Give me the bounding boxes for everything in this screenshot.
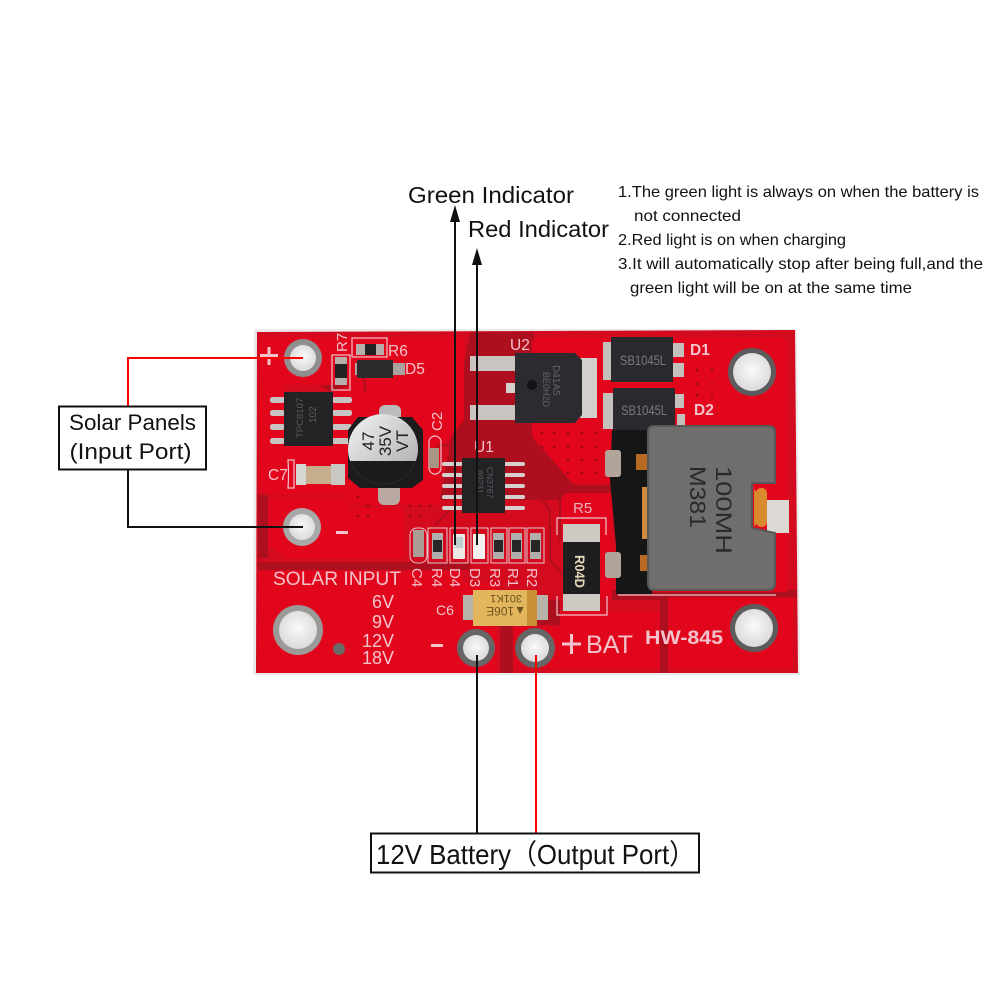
silkscreen labels: D5 — [405, 361, 425, 378]
silkscreen labels: D1 — [690, 342, 710, 359]
current sense resistor R5: R04D — [572, 555, 588, 588]
wire: battery positive — [535, 655, 537, 833]
silkscreen labels: U1 — [474, 439, 494, 456]
chip U1 CN3767 — [442, 458, 525, 513]
silkscreen labels: 6V — [372, 592, 394, 612]
silkscreen outlines — [288, 338, 776, 615]
silkscreen labels: U2 — [510, 337, 530, 354]
silkscreen labels: R1 — [504, 568, 521, 587]
via dots — [357, 369, 713, 517]
MOSFET U2 — [470, 353, 597, 423]
wire: solar negative — [128, 470, 303, 527]
electrolytic capacitor 47 35V VT: VT — [393, 430, 412, 452]
diode D2: SB1045L — [621, 402, 667, 418]
MOSFET U2: D41A5 — [550, 365, 561, 396]
electrolytic capacitor 47 35V VT — [346, 405, 423, 505]
C7 capacitor — [296, 464, 345, 485]
silkscreen labels: C7 — [268, 467, 288, 484]
C6 tantalum capacitor: ▲106E — [486, 604, 526, 618]
chip TPC8107: 102 — [308, 406, 319, 423]
silkscreen labels: SOLAR INPUT — [273, 569, 401, 590]
label: red indicator: Red Indicator — [468, 216, 609, 242]
indicator notes: 2.Red light is on when charging — [618, 232, 846, 249]
chip U1 CN3767: CN3767 — [485, 467, 495, 498]
inductor 100MH M381: 100MH — [711, 466, 736, 554]
silkscreen labels: C6 — [436, 602, 454, 618]
indicator notes: 3.It will automatically stop after being full,and the — [618, 256, 983, 273]
silkscreen labels: 18V — [362, 648, 394, 668]
indicator notes — [618, 184, 983, 297]
electrolytic capacitor 47 35V VT: 35V — [376, 425, 395, 456]
diode D1: SB1045L — [620, 352, 666, 368]
indicator notes: 1.The green light is always on when the battery is — [618, 184, 979, 201]
indicator notes: not connected — [634, 208, 741, 225]
silkscreen labels — [260, 333, 723, 668]
label: green indicator: Green Indicator — [408, 182, 574, 208]
circuit board — [253, 329, 800, 675]
label: solar panels input port: (Input Port) — [70, 439, 192, 464]
silkscreen labels: R6 — [388, 343, 408, 360]
silkscreen labels: 9V — [372, 612, 394, 632]
chip U1 CN3767: 89231 — [475, 470, 485, 494]
trace lines — [360, 372, 563, 575]
electrolytic capacitor 47 35V VT: 47 — [359, 432, 378, 450]
silkscreen labels: D2 — [694, 402, 714, 419]
silkscreen labels: BAT — [586, 631, 633, 659]
silkscreen labels: R2 — [523, 568, 540, 587]
silkscreen labels: C4 — [408, 568, 425, 587]
diode D1 — [603, 337, 684, 382]
silkscreen labels: R5 — [573, 500, 592, 517]
label: 12V battery output port: 12V Battery（Output Port） — [376, 839, 695, 870]
chip TPC8107 — [270, 392, 352, 446]
C2 capacitor — [429, 448, 439, 468]
mounting holes and terminals — [273, 339, 778, 668]
copper pours — [259, 337, 793, 673]
silkscreen labels: R3 — [486, 568, 503, 587]
current sense resistor R5 — [563, 524, 600, 611]
diode D2 — [603, 388, 685, 432]
silkscreen labels: D3 — [466, 568, 483, 587]
silkscreen labels: R4 — [428, 568, 445, 587]
label: solar panels input port — [59, 406, 206, 470]
inductor 100MH M381: M381 — [685, 466, 710, 528]
indicator notes: green light will be on at the same time — [630, 280, 912, 297]
dark channels — [258, 332, 797, 673]
chip TPC8107: TPC8107 — [295, 398, 306, 438]
silkscreen labels: R7 — [334, 333, 351, 352]
MOSFET U2: BE0H2D — [541, 372, 551, 408]
inductor 100MH M381 — [605, 426, 789, 594]
silkscreen labels: HW-845 — [645, 628, 723, 649]
wire: battery negative — [476, 655, 478, 833]
arrow: green indicator — [450, 205, 460, 545]
silkscreen labels: D4 — [446, 568, 463, 587]
C6 tantalum capacitor: 301K1 — [490, 592, 522, 604]
silkscreen labels: C2 — [429, 412, 446, 431]
silkscreen labels: 12V — [362, 631, 394, 651]
label: solar panels input port: Solar Panels — [69, 410, 196, 435]
wire: solar positive — [128, 358, 303, 406]
resistor and LED row — [410, 528, 544, 563]
C6 tantalum capacitor — [463, 590, 548, 626]
arrow: red indicator — [472, 248, 482, 545]
small SMD parts top left — [335, 344, 405, 385]
